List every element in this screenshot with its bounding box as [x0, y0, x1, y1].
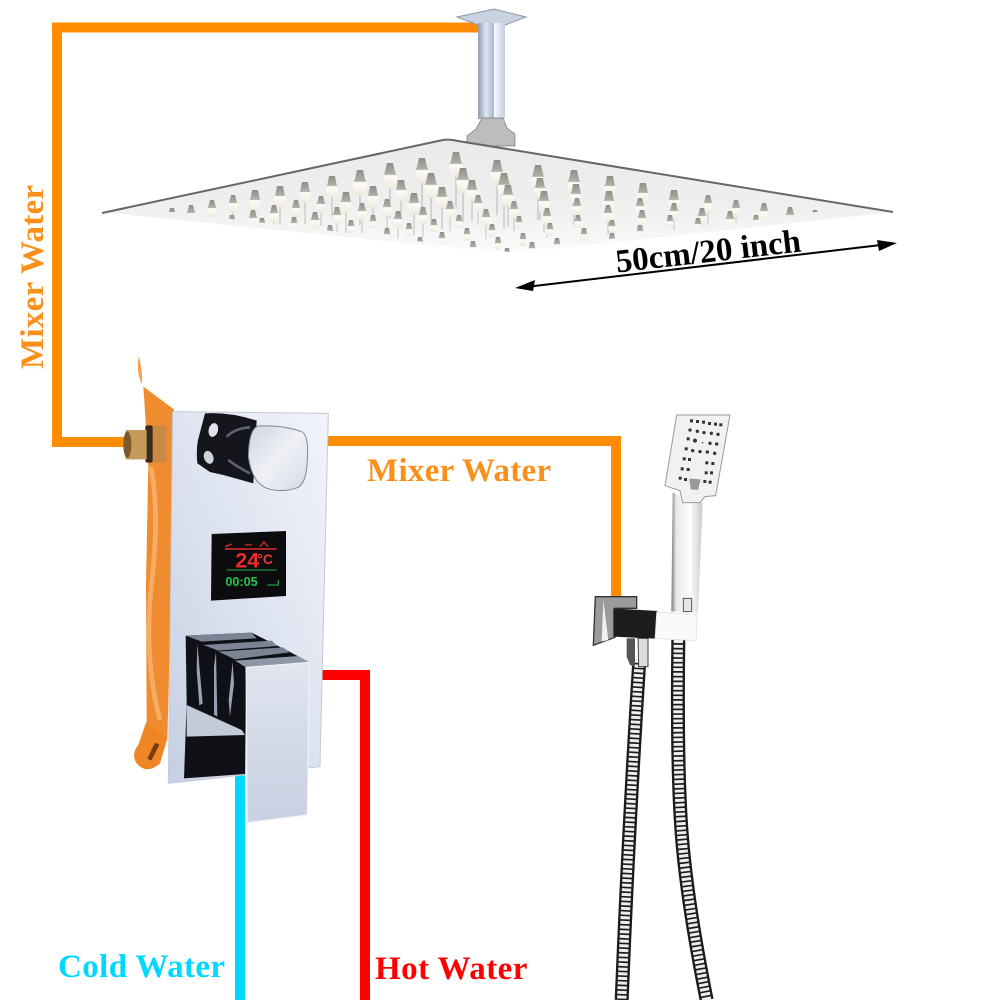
wall bracket plate: [593, 597, 637, 645]
arrowhead left: [515, 280, 535, 291]
bracket arm: [613, 608, 657, 639]
shower arm: [478, 23, 505, 119]
knob base lower hole: [202, 449, 215, 465]
dimension label: 50cm/20 inch: [614, 224, 803, 280]
LCD display: [211, 531, 286, 601]
front lever top: [235, 656, 309, 667]
knob base upper hole: [207, 422, 220, 438]
left flexible hose: [622, 660, 639, 1000]
lever step tops: [186, 633, 289, 659]
membrane tab: [134, 723, 167, 769]
red status bar: [225, 546, 277, 551]
white holder cradle: [655, 612, 697, 641]
spray switch: [689, 479, 701, 490]
red status icons: [225, 542, 268, 547]
square plate: [102, 139, 893, 254]
pipe: hot water: [322, 675, 365, 1000]
lever rear block: [184, 633, 309, 778]
pipe: cold water: [235, 770, 245, 1000]
label: hot water: Hot Water: [375, 951, 528, 987]
hand shower and bracket: [593, 415, 730, 1000]
pipe: mixer water to rain shower: [57, 28, 478, 442]
shower face: [665, 415, 730, 503]
brass nut: [152, 425, 167, 463]
degree unit: °C: [257, 551, 273, 567]
brass thread opening: [123, 431, 131, 458]
flow unit: [267, 580, 278, 585]
tab slot: [147, 743, 159, 761]
left hose connector: [627, 638, 635, 667]
left hose windings: [622, 660, 639, 1000]
screen: [211, 531, 286, 601]
membrane highlight: [149, 467, 160, 720]
dimension arrow: [530, 244, 885, 286]
handle: [671, 493, 703, 613]
pipe: mixer water to hand shower: [326, 441, 616, 600]
temperature: 24: [235, 548, 259, 572]
protective tape wisp: [138, 356, 142, 384]
rain shower head: [102, 9, 893, 261]
orange protective membrane: [143, 387, 174, 741]
lever side reflections: [197, 643, 234, 717]
dimension: 50cm/20 inch: [515, 224, 897, 291]
time readout: 00:05: [225, 575, 258, 589]
right hose connector: [638, 638, 648, 667]
knob cap: [248, 426, 308, 491]
spray nozzles: [679, 419, 722, 484]
diverter valve with digital display: [123, 356, 328, 823]
knob neck highlight: [227, 427, 250, 473]
arrowhead right: [877, 240, 897, 251]
label: mixer water horizontal: Mixer Water: [367, 453, 551, 489]
lever underside reflection: [187, 705, 245, 737]
bracket plate shine: [602, 600, 608, 642]
handle clip: [683, 598, 692, 612]
right hose windings: [678, 640, 707, 1000]
chrome face plate: [168, 412, 328, 783]
front lever face: [246, 662, 309, 823]
brass thread: [124, 430, 147, 459]
label: cold water: Cold Water: [58, 949, 225, 985]
green status bar: [227, 568, 277, 572]
rubber seal: [145, 425, 153, 463]
nozzles: [167, 152, 820, 261]
right flexible hose: [678, 640, 707, 1000]
plate top edge: [102, 140, 893, 213]
arm connector nut: [467, 118, 515, 146]
ceiling flange: [457, 9, 526, 25]
knob base: [197, 413, 257, 483]
label: mixer water vertical: Mixer Water: [15, 185, 51, 369]
